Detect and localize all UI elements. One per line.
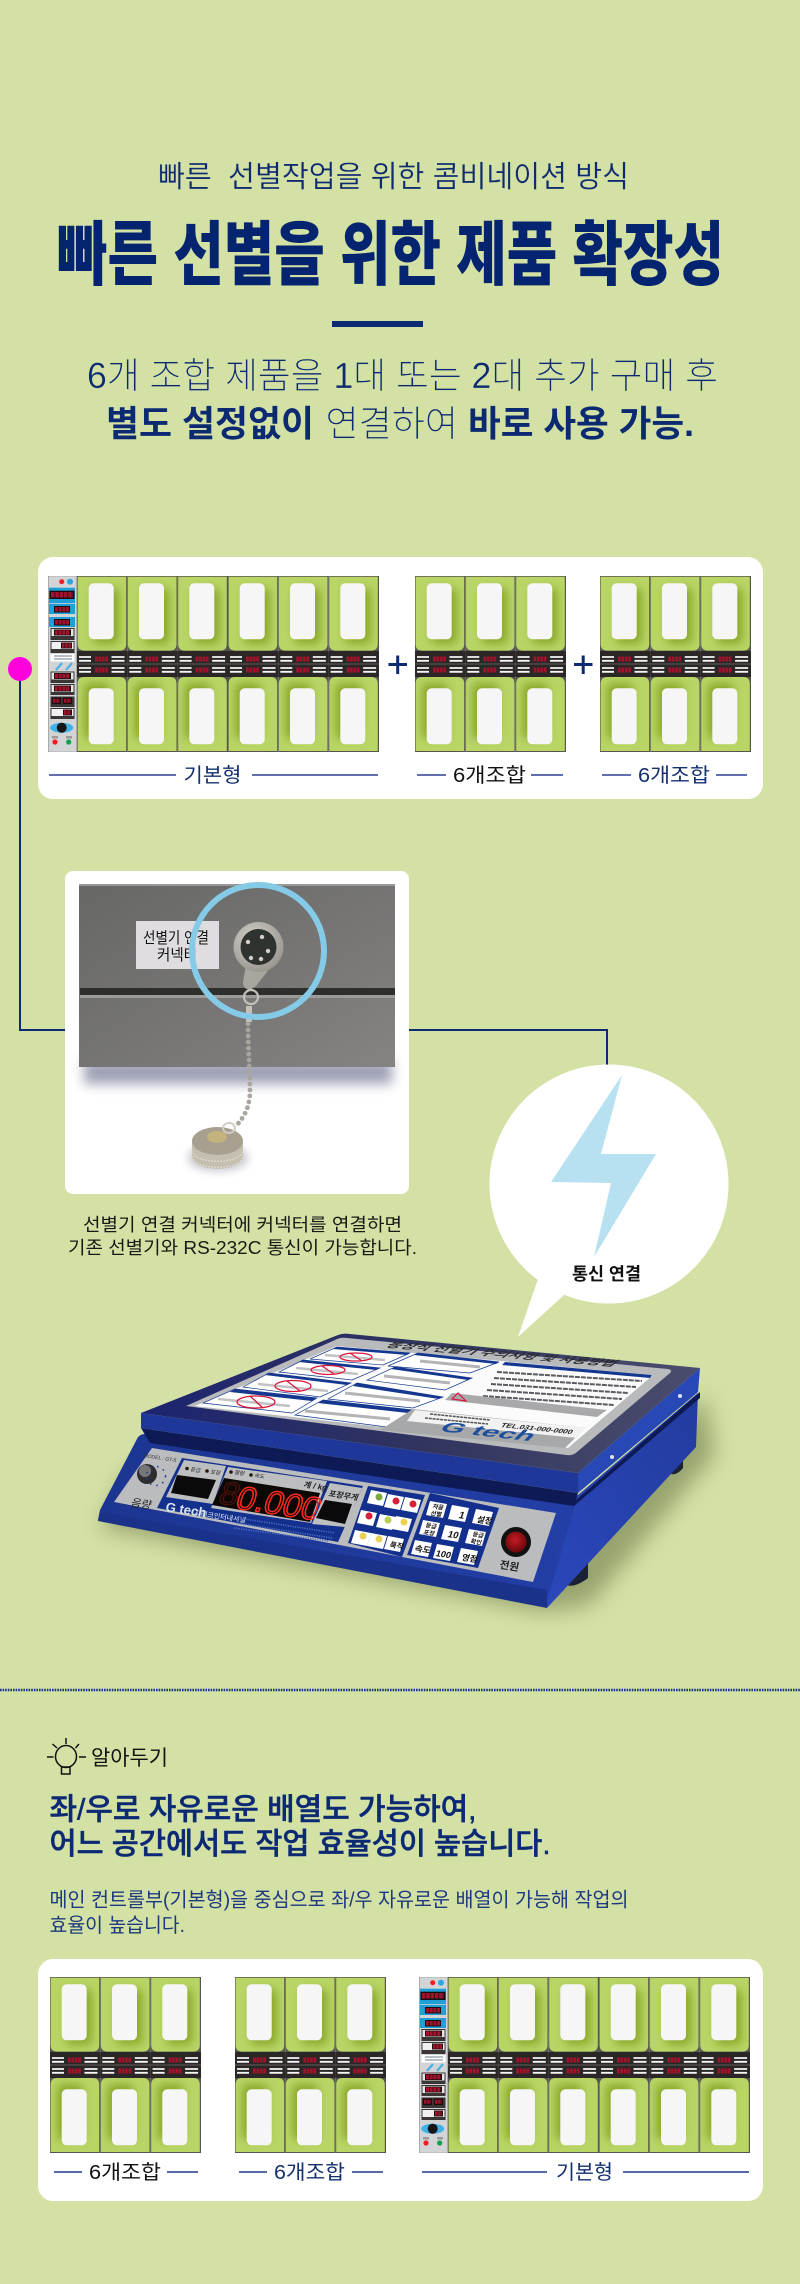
tare weight display [312, 1483, 362, 1527]
tip text block: 어느 공간에서도 작업 효율성이 높습니다. [50, 1828, 550, 1861]
grade and packing display: 포장 [209, 1469, 222, 1477]
label: 6 combo 2: 6개조합 [638, 764, 710, 787]
tip text block: 좌/우로 자유로운 배열도 가능하여, [50, 1794, 476, 1826]
icon: light bulb [47, 1738, 86, 1774]
main LED display: 평량 [233, 1469, 246, 1477]
connector label sticker: 커넥터 [157, 946, 197, 964]
main LED display [211, 1467, 329, 1528]
title underline bar [332, 321, 423, 327]
label: 6 combo middle: 6개조합 [274, 2161, 345, 2184]
photo caption: 선별기 연결 커넥터에 커넥터를 연결하면 [83, 1215, 402, 1235]
header text block [57, 161, 724, 444]
volume knob [129, 1452, 211, 1512]
function keypad: 1 [457, 1510, 467, 1522]
navy display housing [157, 1458, 363, 1542]
base front lip [98, 1512, 547, 1608]
function keypad: 등급 [471, 1531, 485, 1540]
function keypad: 포장 [422, 1528, 436, 1538]
fruit keypad [348, 1486, 425, 1557]
warning cards: left column [203, 1347, 410, 1413]
main LED display: 속도 [253, 1471, 266, 1480]
function keypad: 설정 [475, 1514, 495, 1526]
basic unit right [419, 1977, 750, 2153]
grade and packing display: 등급 [189, 1466, 202, 1474]
lid right edge [578, 1368, 700, 1493]
instructions text column [445, 1362, 652, 1417]
main LED display: 8 [214, 1476, 245, 1513]
volume knob: 음량 [129, 1497, 153, 1512]
front brand text: 지테크인터내셔널 [194, 1508, 247, 1525]
volume knob: MODEL : GT-5 · 중량식 선별기 [142, 1452, 211, 1469]
function keypad: 영점 [460, 1552, 480, 1564]
ground shadow [100, 1395, 715, 1612]
6-tray add-on 2 [600, 576, 751, 752]
panel: expansion configuration [38, 557, 763, 799]
description line 2: 별도 설정없이 [106, 403, 314, 444]
front brand text [164, 1499, 335, 1541]
6-tray add-on middle [235, 1977, 386, 2153]
magenta connector dot [8, 657, 32, 681]
blue highlight ring [192, 885, 324, 1017]
tip heading with bulb icon [47, 1738, 168, 1774]
tip text block: 효율이 높습니다. [50, 1914, 185, 1937]
base side [545, 1393, 698, 1608]
function keypad: 속도 [413, 1543, 432, 1555]
tip text block: 메인 컨트롤부(기본형)을 중심으로 좌/우 자유로운 배열이 가능해 작업의 [50, 1888, 628, 1912]
description line 2 [106, 403, 694, 444]
sheet title: 동상식 선별기 주의사항 및 사용방법 [383, 1340, 623, 1368]
product illustration: sorting scale [98, 1334, 715, 1612]
description line 2: 바로 사용 가능. [468, 403, 694, 444]
connector label sticker: 선별기 연결 [143, 929, 209, 947]
label: 6 combo left: 6개조합 [89, 2161, 161, 2184]
function keypad: 100 [434, 1548, 453, 1560]
lid screws [610, 1394, 682, 1459]
plus sign 1 [388, 656, 407, 674]
contact box: TEL.031-000-0000 [499, 1422, 576, 1436]
6-tray add-on 1 [415, 576, 566, 752]
gray front control panel [114, 1448, 556, 1582]
connector label sticker [136, 921, 219, 969]
round connector socket [234, 922, 284, 990]
bubble label: 통신 연결 [572, 1264, 641, 1284]
function keypad: 10 [446, 1529, 460, 1541]
function keypad: 선별 [429, 1509, 443, 1519]
dotted section divider [0, 1689, 800, 1691]
prohibition marks [237, 1353, 372, 1408]
icon: lightning bolt [551, 1075, 656, 1257]
guide cards: middle column [295, 1353, 499, 1427]
tare weight display: 포장무게 [327, 1488, 360, 1502]
function keypad [407, 1493, 499, 1568]
power switch: 전원 [498, 1558, 520, 1574]
chain and ring [236, 990, 258, 1126]
function keypad: 확인 [469, 1537, 483, 1547]
base front [98, 1434, 578, 1604]
description line 1: 6개 조합 제품을 1대 또는 2대 추가 구매 후 [87, 355, 718, 396]
photo of housing [79, 884, 395, 1067]
front brand text: G tech [164, 1499, 208, 1520]
panel: connector photo card [65, 871, 409, 1194]
power switch [498, 1527, 531, 1574]
rubber feet [566, 1440, 683, 1586]
photo caption: 기존 선별기와 RS-232C 통신이 가능합니다. [68, 1238, 417, 1258]
6-tray add-on left [50, 1977, 201, 2153]
connection line from control unit to communication bubble [8, 657, 607, 1066]
gap shadow below lid [141, 1392, 700, 1506]
main LED display: 계 / kg [302, 1479, 329, 1492]
lid top surface [141, 1334, 700, 1473]
tip heading with bulb icon: 알아두기 [91, 1747, 168, 1770]
function keypad: 등급 [424, 1522, 438, 1531]
plus sign 2 [574, 656, 592, 674]
main LED display: 0.000 [231, 1481, 326, 1528]
brand strip [380, 1409, 585, 1448]
panel: free left/right arrangement [38, 1959, 763, 2201]
function keypad: 처음 [431, 1502, 445, 1512]
instruction sheet [195, 1340, 653, 1448]
photo shadow [84, 1060, 392, 1084]
contact box [407, 1410, 585, 1438]
speech bubble: communication link [490, 1064, 728, 1337]
description line 2: 연결하여 [326, 403, 458, 444]
fruit keypad: 특작 [388, 1539, 405, 1551]
connector cap [188, 1123, 248, 1171]
grade and packing display [166, 1460, 226, 1504]
brand name: G tech [435, 1419, 542, 1444]
label: basic: 기본형 [184, 764, 242, 787]
tip text block [50, 1794, 628, 1937]
basic unit with control column [48, 576, 379, 752]
label: 6 combo 1: 6개조합 [453, 764, 526, 787]
housing seam [80, 988, 395, 995]
photo caption [68, 1215, 417, 1258]
gray top plate [186, 1338, 671, 1455]
label: basic right: 기본형 [556, 2161, 613, 2184]
subtitle: 빠른 선별작업을 위한 콤비네이션 방식 [158, 161, 629, 194]
lid front edge [141, 1413, 578, 1493]
